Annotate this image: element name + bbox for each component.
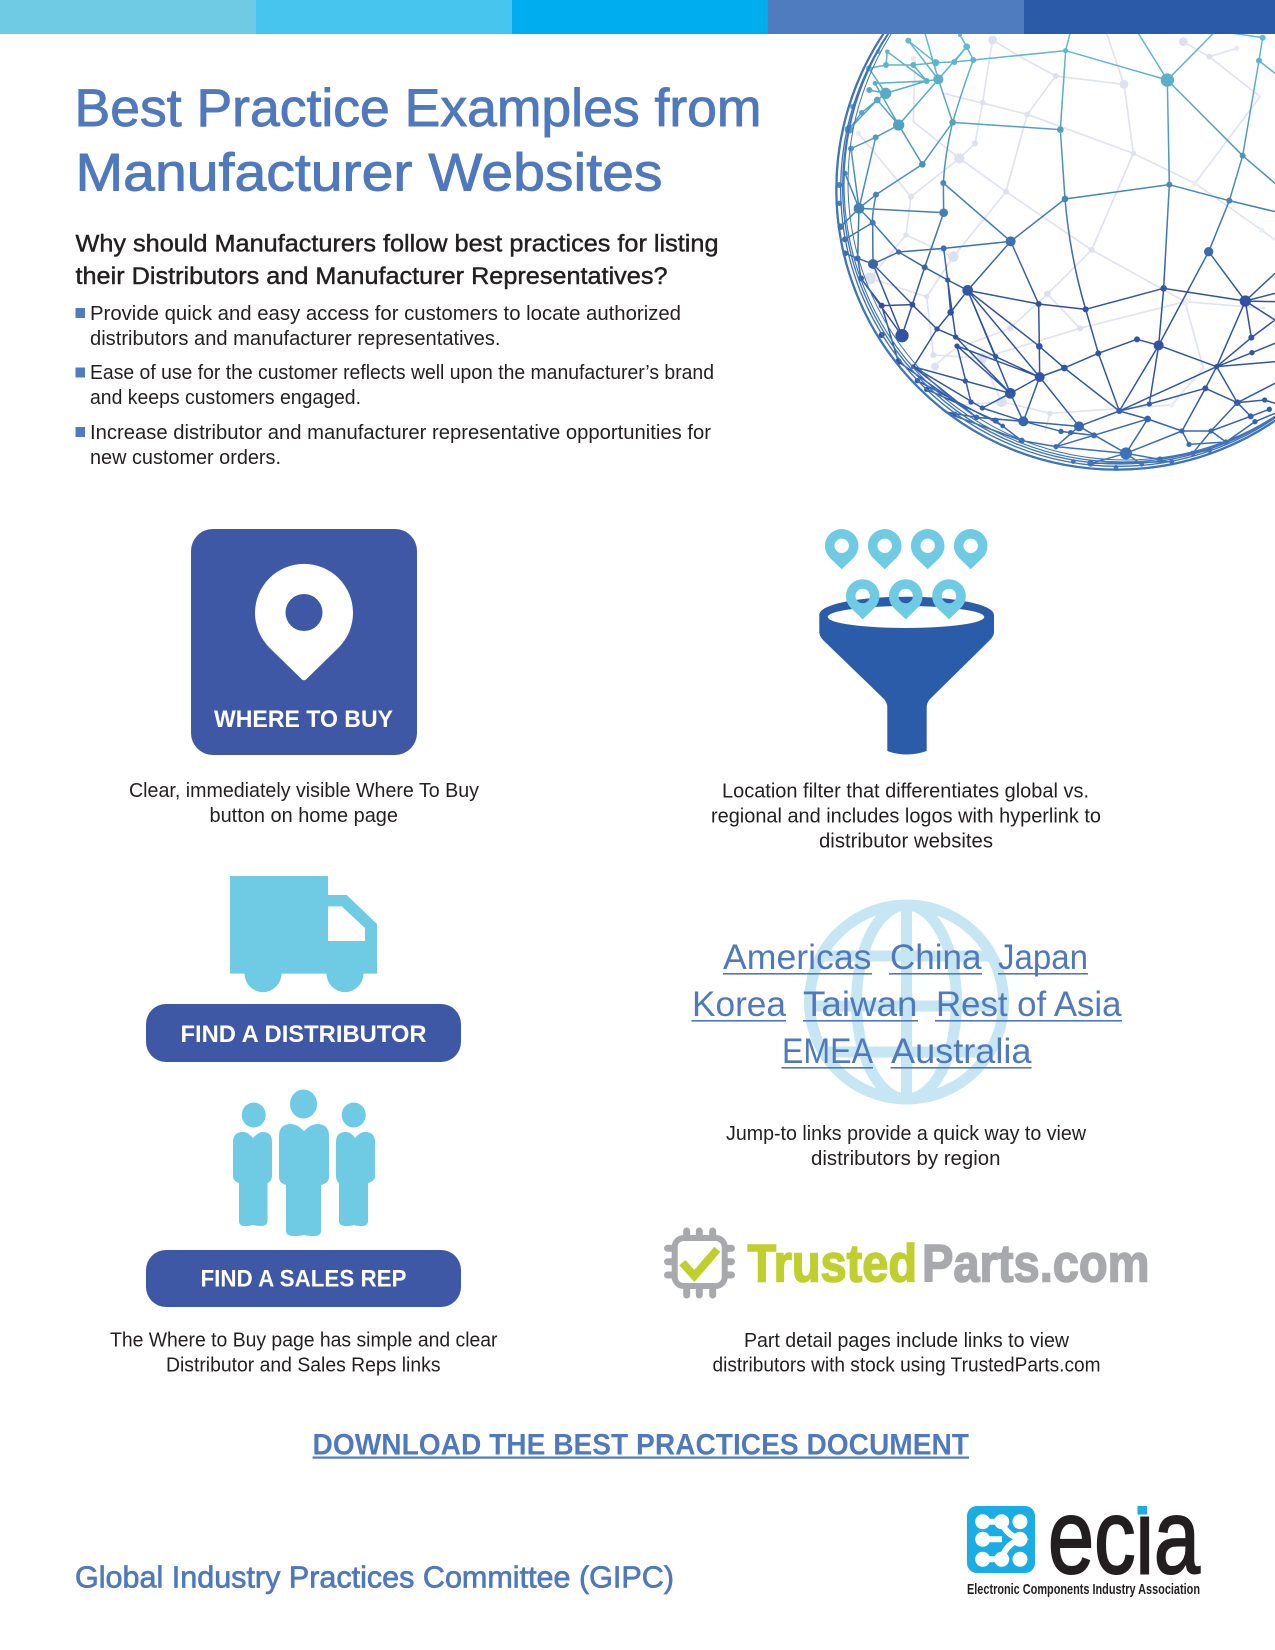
caption: jump-to links: Jump-to links provide a quick way to view <box>726 1122 1086 1145</box>
region jump-to links <box>692 938 1122 1071</box>
icon: delivery truck <box>230 876 377 992</box>
icon: three sales reps <box>233 1090 375 1236</box>
find a distributor button <box>146 1004 461 1062</box>
caption: location filter <box>711 780 1101 852</box>
find a sales rep button: FIND A SALES REP <box>200 1266 406 1292</box>
caption: where to buy: button on home page <box>210 804 398 827</box>
caption: where to buy <box>129 779 480 827</box>
caption: jump-to links: distributors by region <box>811 1147 1000 1170</box>
icon: location pin <box>255 564 353 680</box>
icon: chip with check mark <box>668 1231 732 1295</box>
bullet list <box>76 302 714 469</box>
TrustedParts logo: Parts.com <box>922 1234 1150 1294</box>
caption: location filter: distributor websites <box>819 830 993 852</box>
bullet list: Provide quick and easy access for customers to locate authorized <box>90 302 681 325</box>
caption: trustedparts <box>712 1329 1100 1376</box>
TrustedParts logo: Trusted <box>748 1234 917 1294</box>
title: Best Practice Examples from <box>74 79 762 138</box>
subheading question: Why should Manufacturers follow best practices for listing <box>76 230 718 258</box>
caption: location filter: regional and includes logos with hyperlink to <box>711 804 1101 828</box>
top colour band <box>0 0 1275 34</box>
subheading question <box>76 230 718 290</box>
caption: where to buy page: The Where to Buy page has simple and clear <box>110 1328 498 1352</box>
region jump-to links: Japan <box>998 938 1088 977</box>
icon: pins dropping into funnel <box>819 529 994 754</box>
caption: where to buy: Clear, immediately visible Where To Buy <box>129 779 480 802</box>
bullet list: and keeps customers engaged. <box>90 386 361 409</box>
TrustedParts logo <box>668 1231 1150 1295</box>
region jump-to links: Americas <box>723 938 872 977</box>
title: Manufacturer Websites <box>76 144 662 202</box>
committee name: Global Industry Practices Committee (GIPC) <box>75 1560 674 1594</box>
find a sales rep button <box>146 1250 461 1307</box>
caption: location filter: Location filter that differentiates global vs. <box>722 780 1089 802</box>
caption: trustedparts: distributors with stock using TrustedParts.com <box>712 1354 1100 1376</box>
subheading question: their Distributors and Manufacturer Representatives? <box>76 263 668 290</box>
bullet list: new customer orders. <box>90 446 281 469</box>
region jump-to links: Taiwan <box>803 985 918 1024</box>
region jump-to links: Rest of Asia <box>936 985 1122 1024</box>
find a distributor button: FIND A DISTRIBUTOR <box>180 1021 426 1048</box>
region jump-to links: Korea <box>692 985 787 1024</box>
icon: pale globe behind region links <box>810 905 1004 1099</box>
caption: where to buy page <box>110 1328 498 1376</box>
caption: jump-to links <box>726 1122 1086 1170</box>
where to buy button: WHERE TO BUY <box>214 706 393 733</box>
ECIA logo <box>967 1478 1200 1598</box>
globe network illustration <box>836 0 1275 470</box>
bullet list: Increase distributor and manufacturer representative opportunities for <box>90 421 711 444</box>
region jump-to links: EMEA <box>782 1032 874 1071</box>
bullet list: distributors and manufacturer representatives. <box>90 327 500 350</box>
ECIA logo: ecia <box>1048 1478 1200 1596</box>
download link: DOWNLOAD THE BEST PRACTICES DOCUMENT <box>312 1428 969 1462</box>
where to buy button <box>191 529 417 755</box>
bullet list: Ease of use for the customer reflects well upon the manufacturer’s brand <box>90 361 714 384</box>
region jump-to links: Australia <box>891 1032 1032 1071</box>
caption: where to buy page: Distributor and Sales Reps links <box>166 1354 440 1376</box>
icon: ecia symbol <box>967 1506 1035 1573</box>
title <box>74 79 762 202</box>
caption: trustedparts: Part detail pages include links to view <box>744 1329 1069 1352</box>
region jump-to links: China <box>890 938 982 977</box>
